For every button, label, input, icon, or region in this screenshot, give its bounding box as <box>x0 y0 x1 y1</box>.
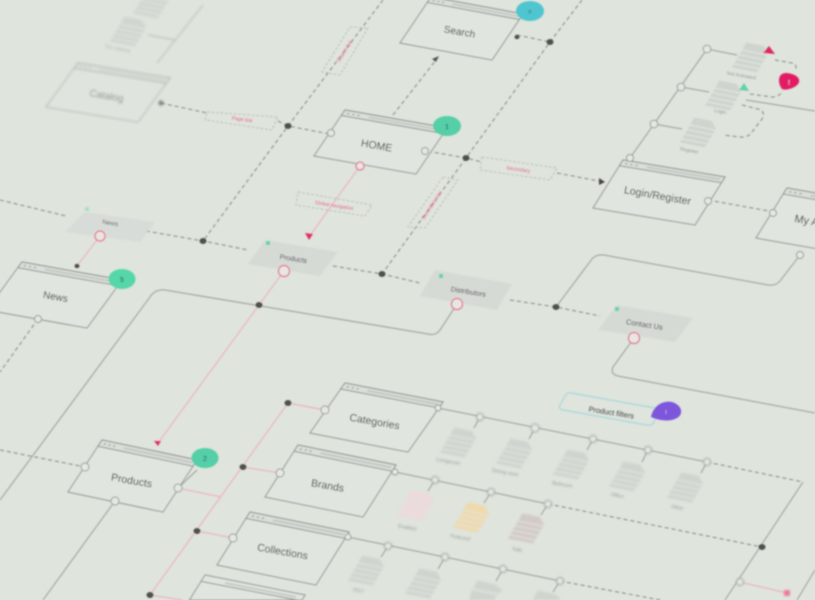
window: news <box>0 262 122 328</box>
tag: distributors <box>420 270 512 310</box>
collection row nodes <box>384 542 744 586</box>
window: partial bottom page <box>190 575 305 600</box>
category row nodes <box>476 414 710 466</box>
brand doc labels: Enabled <box>398 523 417 533</box>
window: login / register <box>593 154 725 225</box>
catalog window: Catalog <box>89 88 124 105</box>
login doc labels <box>679 71 756 156</box>
status triangles <box>739 46 775 91</box>
label: secondary: Secondary <box>506 165 531 175</box>
junction dots <box>74 35 766 598</box>
label: page link: Page link <box>232 116 253 124</box>
label: secondary navigation <box>408 177 458 228</box>
small node <box>158 100 164 106</box>
tag: products <box>248 240 338 276</box>
category doc labels: Livingroom <box>436 457 461 467</box>
label: global navigation: Global navigation <box>315 200 354 212</box>
badge: search <box>516 1 544 21</box>
window: categories: Categories <box>348 412 401 432</box>
window: products <box>68 440 197 512</box>
tag: news <box>65 207 155 242</box>
window: news: News <box>42 290 69 305</box>
label: search link <box>322 27 368 75</box>
window: home: HOME <box>360 137 393 155</box>
brand doc labels: Featured <box>450 533 471 543</box>
collection documents <box>348 556 560 600</box>
window: brands <box>265 445 398 517</box>
login documents <box>680 42 772 148</box>
dashed sitemap lines <box>0 0 780 467</box>
login doc labels: Not Activated <box>726 71 756 82</box>
tag: products: Products <box>279 254 308 265</box>
badge: home <box>433 116 461 136</box>
badge: search: ⌕ <box>528 7 532 16</box>
label: global navigation <box>296 192 372 216</box>
badge: home: 1 <box>445 124 449 131</box>
label: search link: Search link <box>336 39 355 63</box>
category documents <box>440 428 706 502</box>
category doc labels: Bedroom <box>552 480 573 490</box>
label: secondary navigation: Secondary nav <box>421 189 444 221</box>
catalog window <box>46 63 170 122</box>
lighter documents layer <box>348 414 790 600</box>
window: login / register: Login/Register <box>623 184 692 208</box>
badge: news <box>108 269 136 289</box>
callout: product filters <box>559 393 659 425</box>
window: collections <box>217 512 351 585</box>
tag: distributors: Distributors <box>450 286 487 299</box>
catalog doc label: The catalog <box>104 44 131 54</box>
login doc labels: Login <box>714 108 727 116</box>
window: categories <box>310 383 443 452</box>
tag: contact us <box>598 305 693 344</box>
catalog documents <box>110 0 172 46</box>
category doc labels: Office <box>610 492 624 500</box>
window: search <box>400 0 523 60</box>
tag: contact us: Contact Us <box>625 317 664 332</box>
window: brands: Brands <box>310 477 345 495</box>
pink end marker <box>784 590 790 596</box>
catalog connector lines <box>148 5 203 63</box>
marker: pink alert: ! <box>788 80 790 87</box>
window: my account <box>756 188 815 258</box>
login tree nodes <box>650 45 711 128</box>
window: search: Search <box>443 24 476 41</box>
window: collections: Collections <box>256 542 309 562</box>
collection doc label: 2017 <box>352 587 364 595</box>
label: secondary <box>480 157 557 180</box>
category doc labels: Dining room <box>491 468 519 478</box>
brand doc labels <box>398 523 523 554</box>
brand doc labels: Sale <box>512 546 523 554</box>
arrowheads <box>154 56 605 446</box>
window: home <box>314 110 447 174</box>
brand row nodes <box>432 476 552 508</box>
category doc labels <box>436 457 684 512</box>
label: page link <box>205 112 278 130</box>
brand documents <box>397 490 548 544</box>
badge: products <box>192 448 218 468</box>
badge: product filters: i <box>665 410 667 416</box>
callout: product filters: Product filters <box>588 404 635 421</box>
marker: pink alert <box>779 73 799 90</box>
category doc labels: Other <box>670 504 684 512</box>
window: products: Products <box>110 472 153 491</box>
badge: news: 5 <box>120 277 124 284</box>
dashed state links <box>723 60 796 137</box>
badge: products: 2 <box>203 456 207 463</box>
login doc labels: Register <box>679 146 699 156</box>
blurred far corner: catalog section <box>46 0 203 122</box>
badge: product filters <box>651 402 681 421</box>
pink navigation lines <box>77 166 787 600</box>
tag: news: News <box>102 219 120 228</box>
